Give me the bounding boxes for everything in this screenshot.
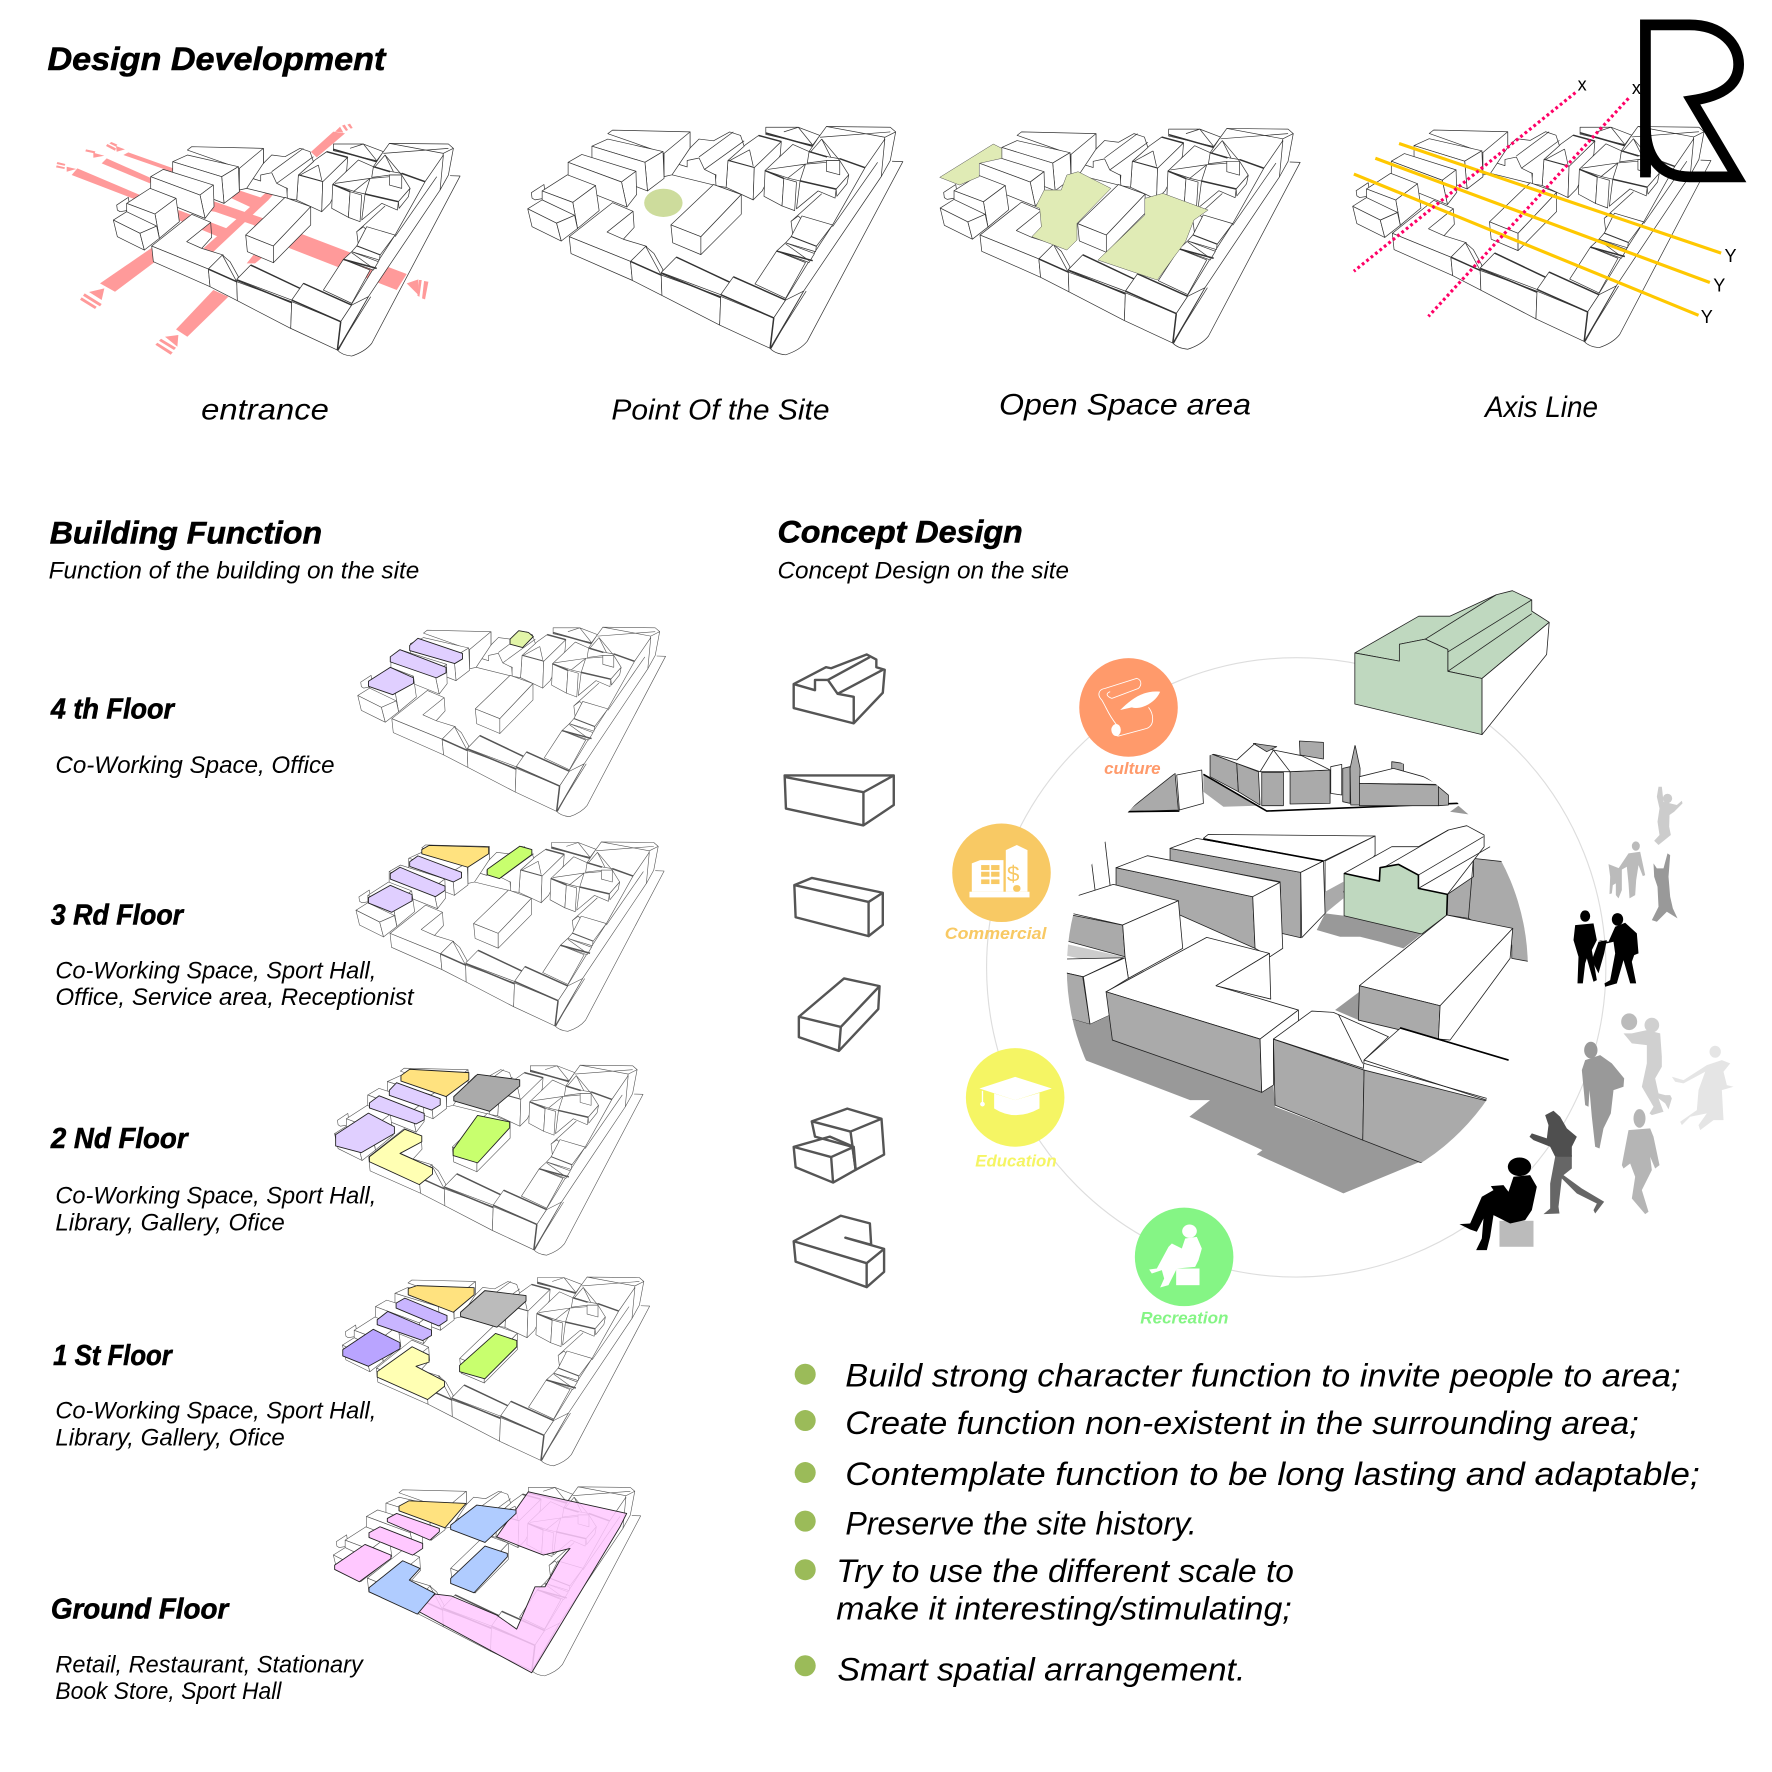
- ground floor functions: [335, 1492, 627, 1673]
- floor description: [55, 959, 415, 1011]
- caption: Open Space area: Open Space area: [999, 389, 1251, 422]
- floor description: Co-Working Space, Sport Hall,: [55, 1184, 376, 1210]
- caption: Axis Line: Axis Line: [1483, 391, 1598, 424]
- silhouette: cheering figure: [1652, 853, 1678, 922]
- icon: education: [966, 1048, 1064, 1170]
- floor description: [55, 1184, 376, 1237]
- floor description: Co-Working Space, Office: [55, 753, 335, 779]
- 3rd floor functions: [368, 845, 532, 912]
- icon: culture: [1079, 658, 1178, 778]
- silhouette: person with dog: [1609, 841, 1645, 898]
- caption: Point Of the Site: Point Of the Site: [611, 393, 829, 425]
- icon: recreation: [1135, 1208, 1233, 1327]
- icon: commercial: [945, 824, 1051, 943]
- floor title: 1 St Floor: [53, 1339, 174, 1371]
- panel: ground floor: [51, 1487, 641, 1705]
- caption: entrance: entrance: [201, 393, 329, 426]
- floor description: Book Store, Sport Hall: [55, 1679, 282, 1705]
- bullet 1: Build strong character function to invite people to area;: [845, 1357, 1680, 1394]
- bullet list: [795, 1357, 1700, 1687]
- silhouette: seated reader on block: [1459, 1157, 1537, 1250]
- panel: 1st floor: [53, 1277, 650, 1466]
- diagram: point of the site: [528, 127, 903, 355]
- massing icon 3: [794, 878, 883, 936]
- subheading: Function of the building: Function of the building on the site: [49, 559, 419, 585]
- heading: Building Function: Building Function: [50, 515, 322, 551]
- panel: 3rd floor: [51, 842, 664, 1031]
- massing icon 4: [799, 978, 880, 1051]
- massing icon 6: [794, 1216, 884, 1287]
- bullet 4: Preserve the site history.: [845, 1505, 1197, 1542]
- heading: Concept Design: Concept Design: [778, 513, 1023, 549]
- floor description: Retail, Restaurant, Stationary: [55, 1653, 365, 1679]
- 4th floor functions: [368, 631, 533, 695]
- 1st floor functions: [343, 1286, 526, 1400]
- diagram: entrance site: [56, 124, 460, 356]
- silhouette: walking woman: [1529, 1111, 1604, 1214]
- logo: R: [1645, 25, 1739, 177]
- axis label Y middle: Y: [1713, 276, 1725, 296]
- massing icon 2: [785, 775, 894, 825]
- floor description: Co-Working Space, Sport Hall,: [55, 959, 376, 985]
- panel: 4th floor: [50, 627, 666, 817]
- point marker: [644, 189, 683, 217]
- 2nd floor functions: [336, 1069, 520, 1185]
- axis label Y bottom: Y: [1701, 307, 1713, 327]
- bullet 5: Try to use the different scale to: [836, 1552, 1294, 1589]
- title: Design Development: Design Development: [47, 41, 387, 77]
- silhouette: leaping figure: [1672, 1046, 1734, 1130]
- diagram: axis line: [1353, 74, 1737, 348]
- bullet 2: Create function non-existent in the surrounding area;: [845, 1404, 1639, 1441]
- icon: green concept building: [1355, 591, 1549, 735]
- bullet 5: [795, 1552, 1294, 1626]
- label: Recreation: Recreation: [1140, 1308, 1228, 1327]
- subheading: Concept Design on the site: Concept Design on the site: [778, 559, 1069, 585]
- Y axis lines: [1354, 144, 1721, 315]
- floor title: 4 th Floor: [50, 693, 176, 725]
- floor title: 3 Rd Floor: [51, 898, 185, 930]
- label: Education: Education: [975, 1151, 1057, 1170]
- massing icon 1: [794, 654, 885, 723]
- floor description: Library, Gallery, Ofice: [55, 1425, 285, 1451]
- silhouette: jumping figure: [1654, 787, 1683, 845]
- floor title: Ground Floor: [51, 1592, 230, 1624]
- floor title: 2 Nd Floor: [50, 1122, 190, 1154]
- floor description: [55, 1398, 376, 1451]
- diagram: open space area: [940, 128, 1300, 349]
- silhouette: standing woman: [1622, 1109, 1660, 1214]
- site model: [113, 143, 460, 356]
- bullet 6: Smart spatial arrangement.: [837, 1650, 1245, 1687]
- people silhouettes: [1459, 787, 1734, 1250]
- massing icon 5: [794, 1109, 884, 1183]
- bullet 3: Contemplate function to be long lasting and adaptable;: [845, 1455, 1700, 1492]
- axis label X left: x: [1578, 74, 1587, 94]
- floor description: Office, Service area, Receptionist: [55, 985, 415, 1011]
- label: culture: culture: [1104, 759, 1161, 778]
- bullet 5: make it interesting/stimulating;: [836, 1589, 1292, 1626]
- floor description: Library, Gallery, Ofice: [55, 1211, 285, 1237]
- silhouette: couple with child: [1573, 910, 1639, 987]
- axis label Y top: Y: [1725, 246, 1737, 266]
- outer ring: [987, 658, 1606, 1277]
- panel: 2nd floor: [50, 1065, 643, 1255]
- axis label X right: x: [1632, 78, 1641, 98]
- silhouette: woman with bag: [1582, 1042, 1624, 1148]
- circular scene: [1063, 741, 1533, 1193]
- floor description: Co-Working Space, Sport Hall,: [55, 1398, 376, 1424]
- floor description: [55, 1653, 365, 1705]
- X axis dotted lines: [1354, 93, 1628, 316]
- open space shapes: [940, 144, 1208, 280]
- silhouette: basketball player: [1621, 1013, 1672, 1115]
- label: Commercial: Commercial: [945, 924, 1047, 943]
- dollar sign: $: [1007, 861, 1020, 886]
- massing icons column: [785, 654, 894, 1287]
- entrance roads: [56, 124, 428, 355]
